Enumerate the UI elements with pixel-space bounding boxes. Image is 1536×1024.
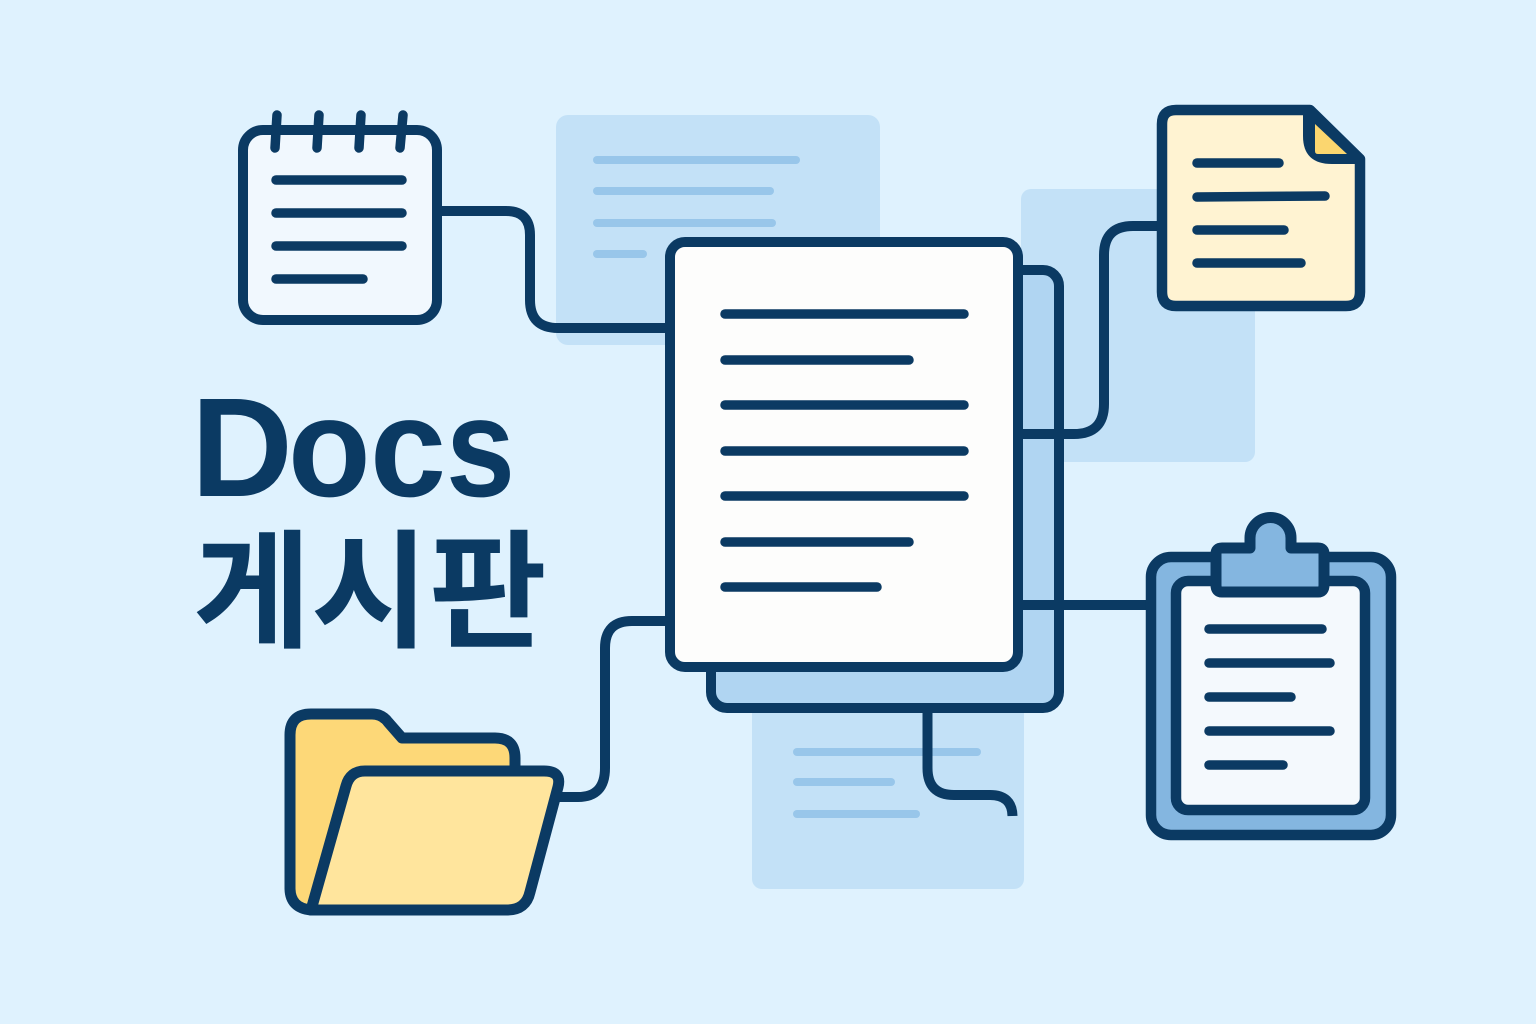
title: 게시판	[193, 522, 547, 665]
background sheet: bottom	[752, 690, 1024, 889]
title: D	[191, 368, 293, 526]
icon: clipboard	[1151, 518, 1391, 835]
title: s	[446, 370, 515, 527]
title: o	[288, 369, 371, 527]
background sheet: top	[556, 115, 880, 345]
title	[191, 368, 547, 665]
icon: notepad	[243, 115, 437, 320]
back page of main document	[711, 270, 1059, 708]
icon: folder	[290, 714, 559, 910]
icon: sticky note	[1162, 106, 1365, 306]
title: c	[370, 369, 446, 526]
connectors	[438, 211, 1162, 816]
background sheet: right	[1021, 189, 1255, 462]
main document	[670, 242, 1018, 667]
